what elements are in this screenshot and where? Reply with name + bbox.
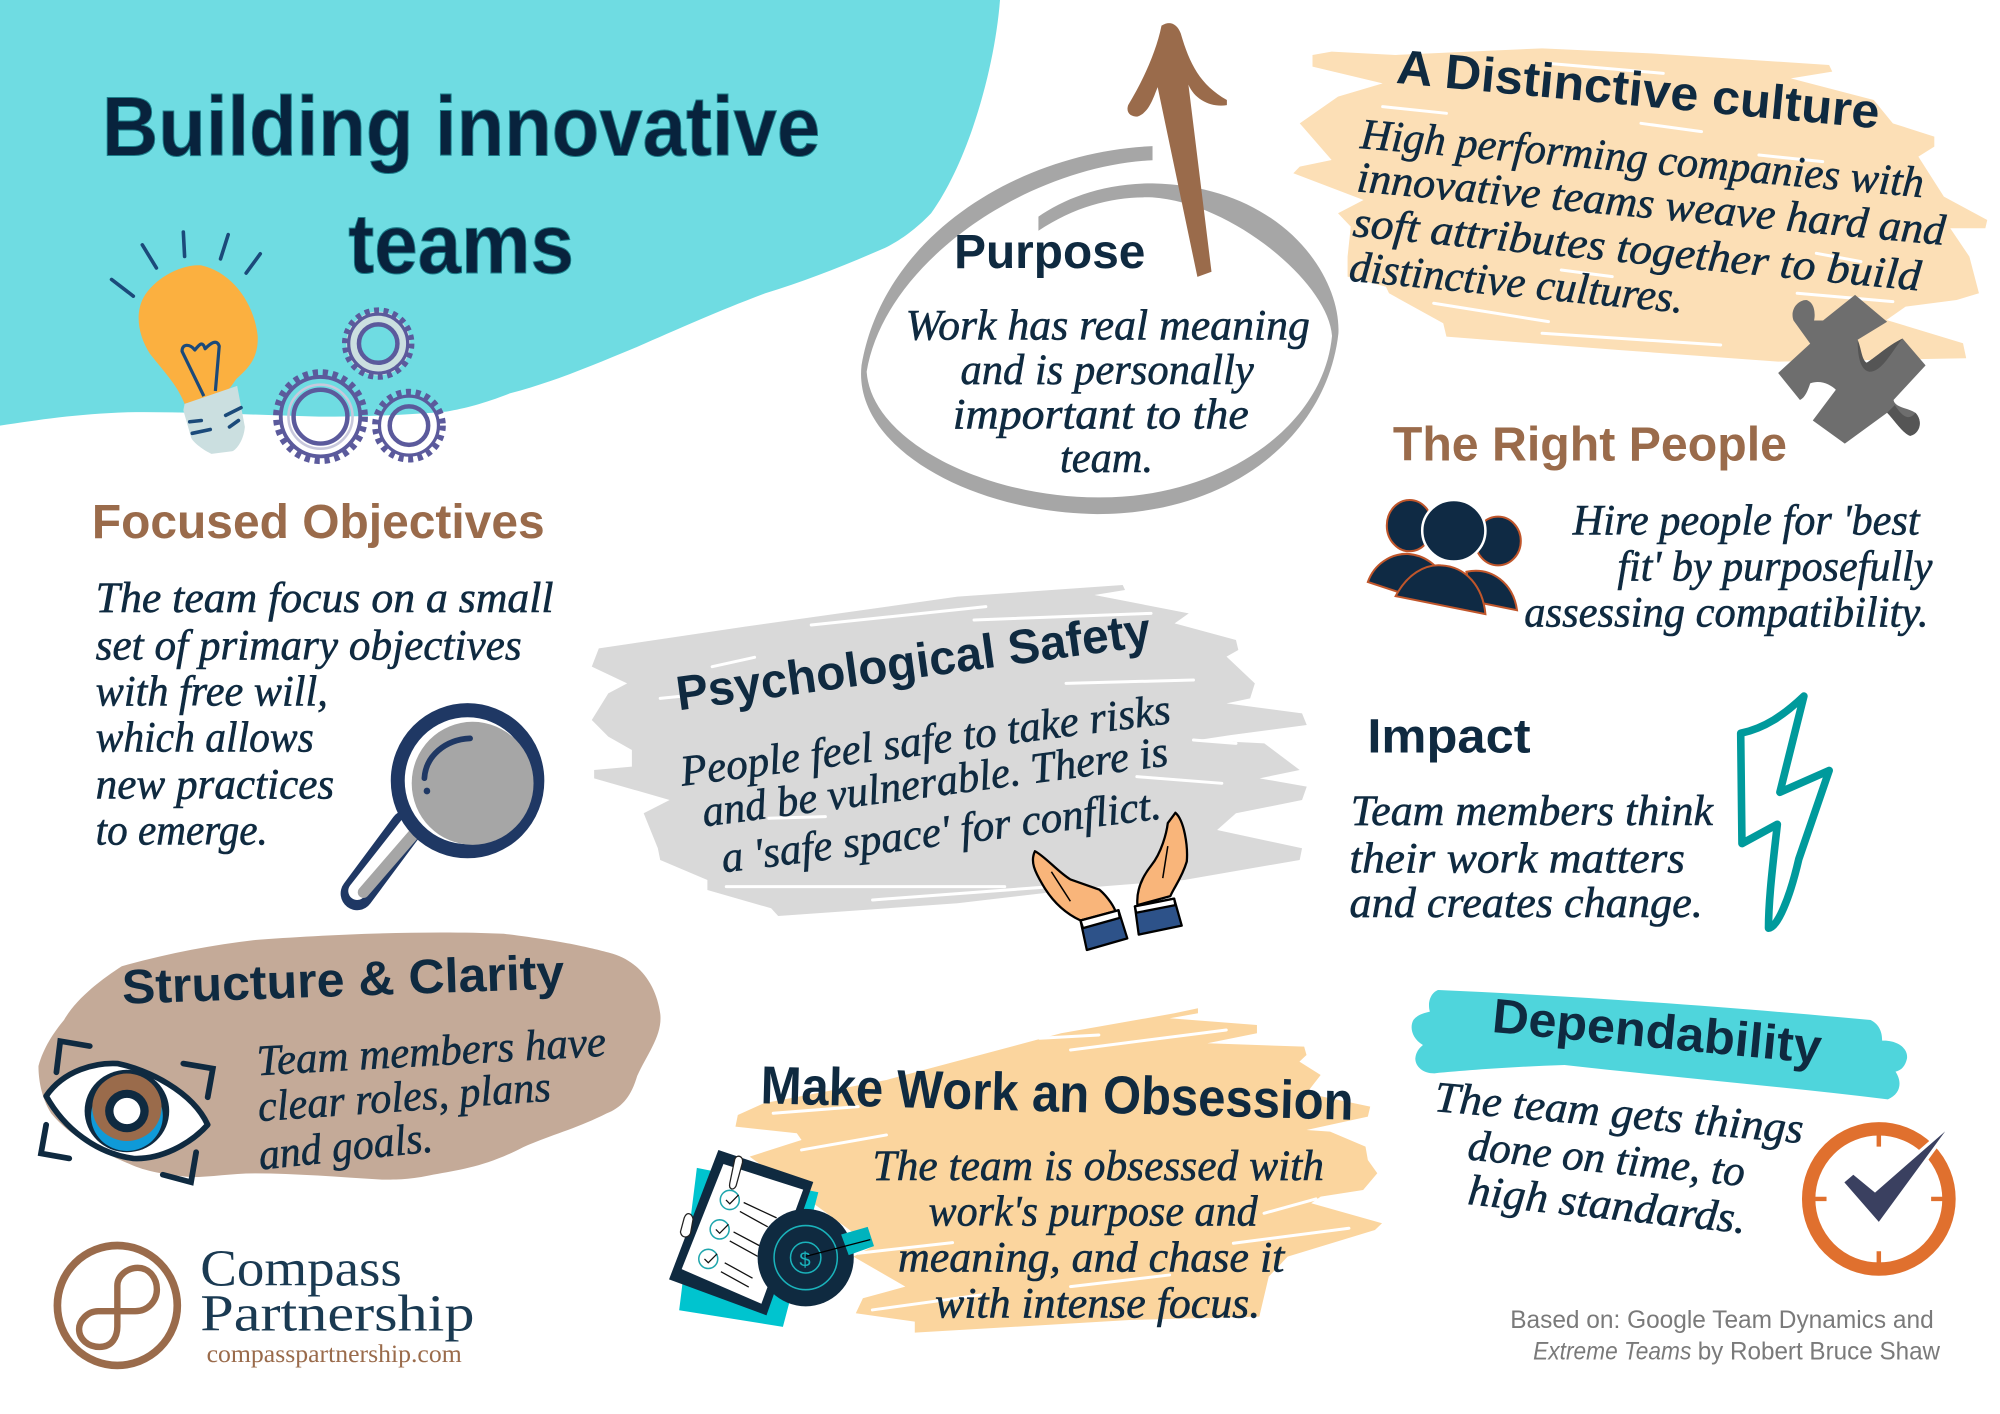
title: teams [348,197,574,291]
text: make work an obsession: Make Work an Obsession [760,1056,1354,1132]
text: impact: their work matters [1349,834,1685,882]
icon: lightbulb [112,232,260,454]
text: dependability: high standards. [1466,1166,1749,1243]
text: dependability: Dependability [1490,989,1824,1074]
text: purpose: Work has real meaning [906,301,1310,349]
logo: compass partnership: Partnership [200,1284,474,1342]
text: source credit [1510,1306,1941,1366]
text: impact [1349,710,1714,927]
text: a distinctive culture: distinctive cultures. [1347,243,1686,323]
panel: dependability brush [1412,990,1907,1099]
text: psychological safety: a 'safe space' for conflict. [719,781,1164,882]
text: purpose: important to the [953,391,1249,439]
text: purpose [906,225,1310,482]
text: structure and clarity: and goals. [256,1114,435,1180]
text: a distinctive culture [1347,40,1948,323]
panel: make work an obsession brush [735,1008,1382,1333]
text: the right people: The Right People [1393,417,1787,471]
logo: compass partnership [57,1240,474,1368]
icon: magnifying glass [357,710,537,894]
icon: people [1368,500,1521,614]
text: structure and clarity: Team members have [256,1018,607,1085]
heading: purpose ellipse and arrow [861,23,1339,514]
text: the right people: fit' by purposefully [1617,542,1933,590]
text: impact: and creates change. [1349,879,1703,927]
text: structure and clarity: clear roles, plans [256,1063,552,1131]
text: source credit: Based on: Google Team Dynamics and [1510,1306,1934,1334]
icon: gears [277,311,442,460]
text: source credit: by Robert Bruce Shaw [1698,1338,1941,1366]
text: dependability: The team gets things [1433,1073,1805,1153]
text: impact: Team members think [1351,787,1714,835]
icon: clock with check [1809,1129,1949,1269]
icon: puzzle piece [1778,295,1926,444]
text: psychological safety [673,603,1173,882]
text: focused objectives: which allows [96,713,314,761]
text: purpose: and is personally [960,346,1255,394]
text: purpose: Purpose [954,225,1145,279]
text: focused objectives [92,495,554,854]
panel: teal header blob [0,0,1000,426]
text: the right people [1393,417,1933,636]
text: focused objectives: with free will, [96,667,328,715]
arrow [1127,23,1227,277]
logo: compass partnership: Compass [200,1240,402,1298]
text: focused objectives: set of primary objectives [96,621,522,669]
title: Building innovative [102,80,820,174]
text: focused objectives: to emerge. [96,806,268,854]
text: focused objectives: The team focus on a small [96,574,554,622]
text: the right people: assessing compatibility. [1524,588,1929,636]
text: structure and clarity [121,945,607,1180]
panel: distinctive culture brush [1293,48,1987,362]
text: purpose: team. [1060,434,1153,482]
text: focused objectives: new practices [96,760,334,808]
icon: open hands [1033,813,1187,950]
title [102,80,820,291]
text: source credit: Extreme Teams [1533,1338,1691,1366]
text: a distinctive culture: High performing companies with [1358,110,1926,207]
panel: psychological safety brush [592,585,1307,916]
text: a distinctive culture: soft attributes together to build [1351,198,1924,301]
text: a distinctive culture: innovative teams weave hard and [1355,153,1948,255]
panel: structure and clarity blob [38,932,661,1180]
icon: lightning bolt [1741,696,1829,928]
text: make work an obsession: meaning, and chase it [898,1234,1285,1282]
text: psychological safety: People feel safe to take risks [677,685,1173,796]
text: a distinctive culture: A Distinctive culture [1394,40,1882,139]
text: dependability [1433,989,1824,1243]
text: focused objectives: Focused Objectives [92,495,545,549]
text: make work an obsession: The team is obsessed with [872,1142,1324,1190]
icon: clipboard and target: $ [799,1249,811,1272]
text: dependability: done on time, to [1466,1122,1747,1196]
text: the right people: Hire people for 'best [1572,496,1921,544]
text: impact: Impact [1367,710,1531,764]
text: psychological safety: Psychological Safety [673,603,1154,721]
ellipse outline [861,146,1339,514]
text: structure and clarity: Structure & Clarity [121,945,565,1015]
text: make work an obsession: work's purpose and [929,1188,1258,1236]
logo: compass partnership: compasspartnership.com [207,1339,462,1368]
icon: clipboard and target [669,1150,874,1327]
icon: eye [41,1041,213,1182]
text: make work an obsession [760,1056,1354,1328]
text: make work an obsession: with intense focus. [935,1280,1260,1328]
text: psychological safety: and be vulnerable. There is [699,728,1171,836]
